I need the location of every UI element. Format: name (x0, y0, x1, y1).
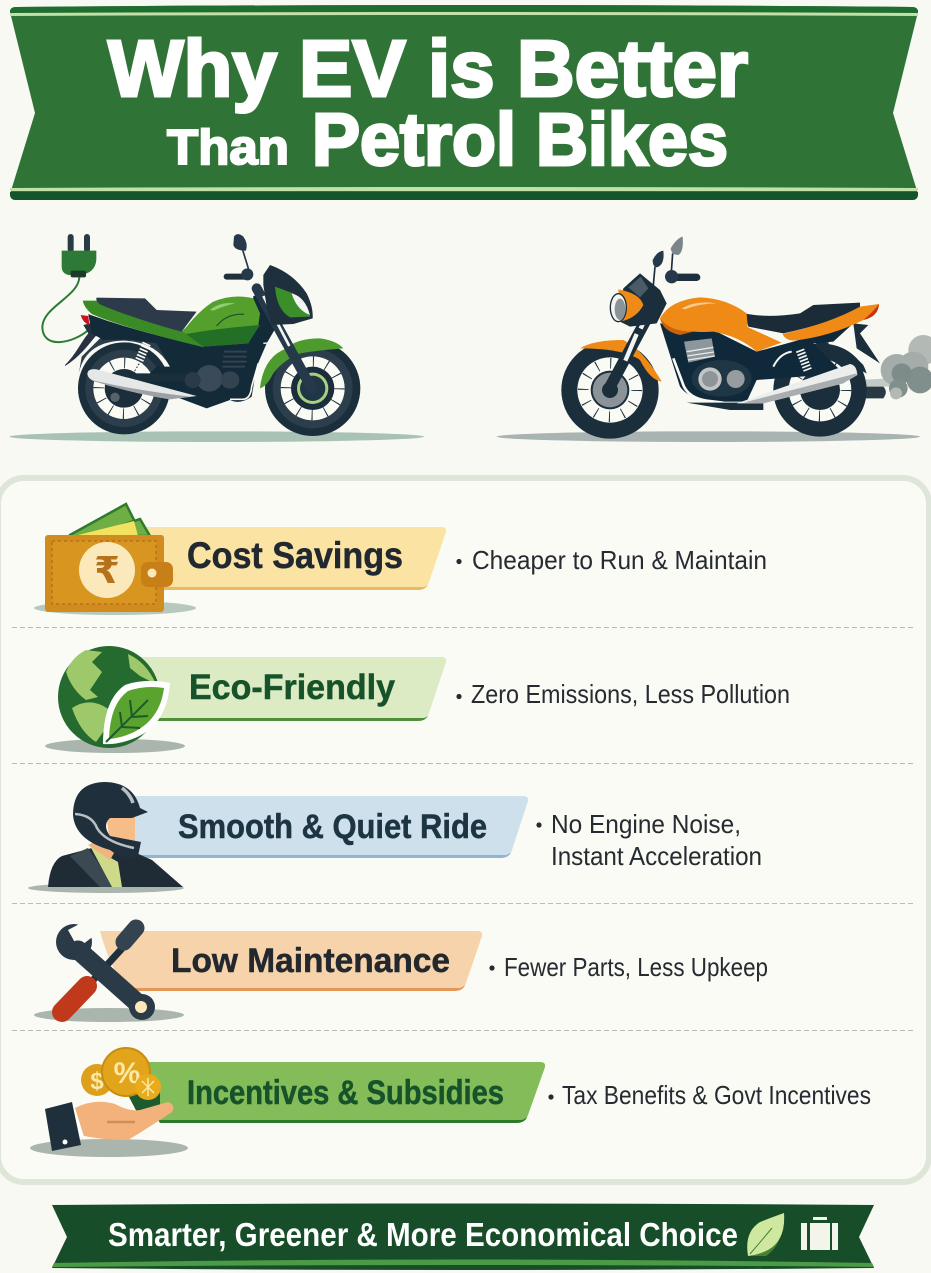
ribbon: low maintenance: Low Maintenance (171, 942, 450, 980)
title line 2: Than: Than (167, 121, 289, 175)
benefits panel (0, 478, 929, 1182)
ribbon: smooth ride: Smooth & Quiet Ride (178, 808, 487, 846)
ribbon: smooth ride (130, 796, 528, 858)
row: cost savings (34, 504, 767, 615)
bullet text: incentives: Tax Benefits & Govt Incentives (562, 1080, 871, 1110)
bullet text: smooth ride (536, 809, 762, 871)
row: low maintenance (34, 921, 768, 1022)
icon: hand holding coins (30, 1048, 188, 1157)
title banner (10, 5, 918, 200)
bullet text: eco-friendly: Zero Emissions, Less Pollution (471, 679, 790, 709)
ribbon: eco-friendly: Eco-Friendly (189, 668, 396, 707)
icon: wallet (34, 504, 196, 615)
bullet text: low maintenance: Fewer Parts, Less Upkeep (504, 952, 768, 982)
title line 2: Petrol Bikes: Petrol Bikes (312, 98, 728, 181)
title line 1: Why EV is Better (108, 24, 748, 113)
petrol motorcycle with smoke (497, 237, 931, 442)
icon: globe with leaf (45, 646, 185, 753)
footer text: Smarter, Greener & More Economical Choice (108, 1216, 738, 1253)
ribbon: low maintenance (100, 931, 482, 991)
ribbon: incentives: Incentives & Subsidies (187, 1074, 504, 1112)
bullet text: smooth ride: Instant Acceleration (551, 841, 762, 871)
icon: wallet: ₹ (94, 549, 120, 592)
icon: leaf (747, 1213, 784, 1256)
row: incentives and subsidies (30, 1048, 871, 1157)
ribbon: cost savings: Cost Savings (187, 535, 403, 576)
ribbon: cost savings (130, 527, 446, 590)
exhaust smoke (857, 335, 931, 399)
bullet text: smooth ride: No Engine Noise, (551, 809, 741, 839)
footer banner (52, 1204, 874, 1270)
icon: crossed wrench and screwdriver (34, 921, 184, 1022)
electric motorcycle with plug (9, 234, 424, 442)
icon: suitcase (801, 1217, 838, 1250)
bullet text: cost savings: Cheaper to Run & Maintain (472, 545, 767, 575)
icon: hand holding coins: $ (90, 1068, 104, 1095)
ribbon: eco-friendly (135, 657, 446, 721)
ribbon: incentives (140, 1062, 545, 1123)
icon: rider with helmet (28, 782, 184, 893)
row: eco-friendly (45, 646, 790, 753)
icon: hand holding coins: % (114, 1057, 140, 1090)
row: smooth and quiet ride (28, 782, 762, 893)
